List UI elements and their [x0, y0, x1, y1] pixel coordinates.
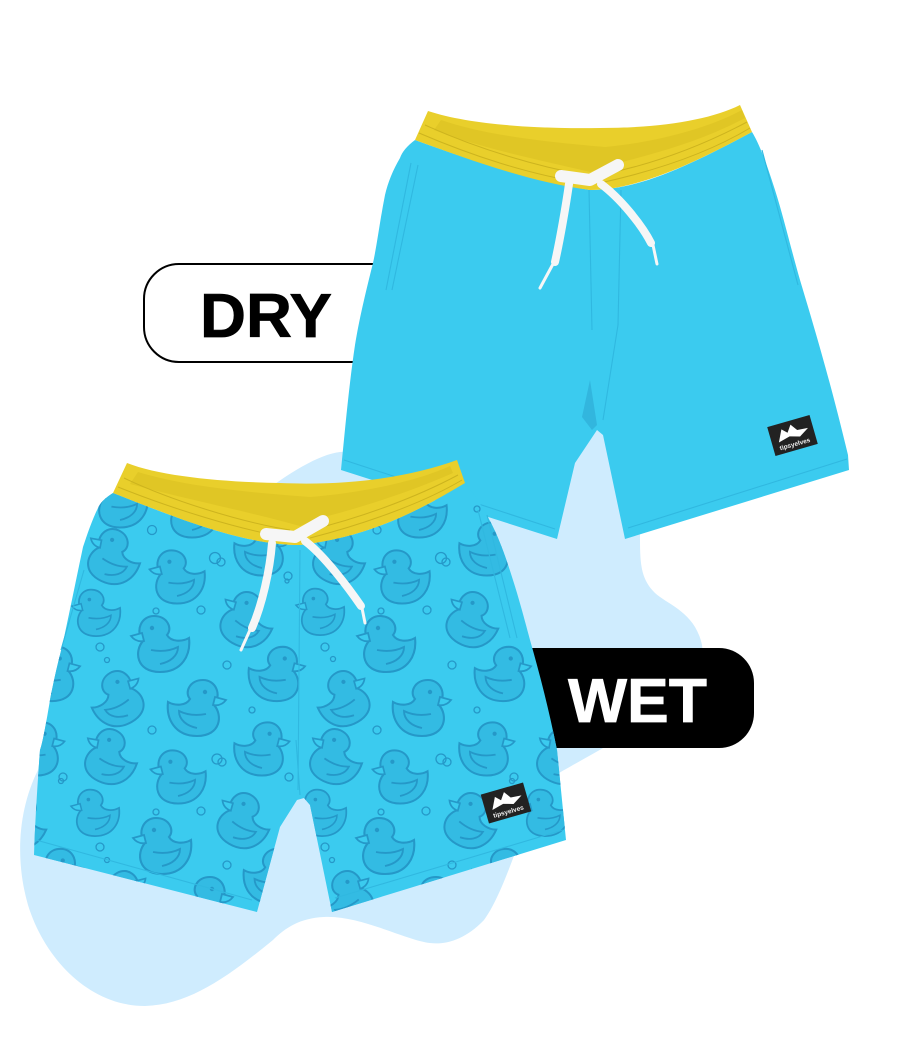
- dry shorts shading and seams: [344, 150, 847, 529]
- dry shorts logo patch: [767, 415, 818, 456]
- dry shorts body: [341, 132, 849, 539]
- wet waistband inner back: [130, 466, 453, 526]
- wet shorts seams: [36, 510, 563, 900]
- wet shorts waistband: [113, 460, 465, 545]
- label: WET: WET: [568, 667, 707, 736]
- background blob: [20, 400, 702, 1006]
- wet shorts logo patch: tipsyelves: [493, 804, 525, 820]
- label: WET: [470, 648, 754, 748]
- dry waistband ribbing: [419, 122, 750, 183]
- dry crotch fold: [582, 380, 597, 430]
- dry waistband inner back: [434, 110, 745, 172]
- label: DRY: [144, 264, 414, 362]
- wet shorts drawstring: [241, 521, 365, 650]
- wet shorts (rubber duck pattern): [34, 460, 566, 912]
- label: DRY: DRY: [200, 282, 332, 351]
- dry shorts drawstring: [540, 165, 657, 288]
- dry shorts logo patch: tipsyelves: [779, 437, 812, 452]
- dry shorts waistband: [415, 105, 752, 190]
- wet waistband ribbing: [118, 475, 462, 538]
- dry shorts (solid blue): [341, 105, 849, 539]
- wet shorts logo patch: [481, 783, 531, 823]
- wet shorts body: [34, 483, 566, 912]
- duck pattern: [34, 461, 565, 912]
